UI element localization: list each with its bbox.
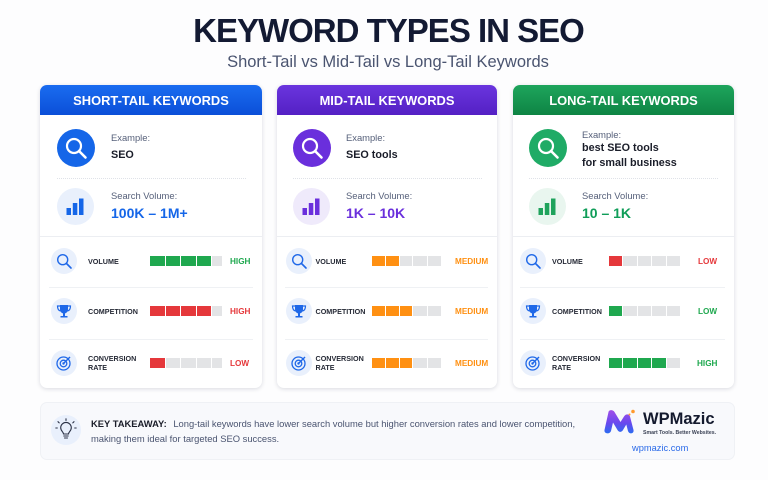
example text: for small business [582, 156, 677, 168]
label: COMPETITION [88, 307, 138, 316]
rating bar [609, 256, 680, 266]
icon: volume chart [57, 188, 94, 225]
row: conversion rate [286, 350, 488, 376]
icon: volume chart [529, 188, 566, 225]
rating bar [372, 306, 441, 316]
heading: mid-tail: MID-TAIL KEYWORDS [320, 93, 454, 108]
subtitle: Short-Tail vs Mid-Tail vs Long-Tail Keywords [227, 53, 549, 71]
icon: search [51, 248, 77, 274]
icon: light bulb [51, 415, 81, 445]
label [316, 354, 364, 372]
row: competition [520, 298, 718, 324]
heading: short-tail: SHORT-TAIL KEYWORDS [73, 93, 229, 108]
search volume label: Search Volume: [346, 190, 412, 201]
label [552, 354, 600, 372]
panel: short-tail keywords [40, 85, 262, 388]
takeaway text: making them ideal for targeted SEO success. [91, 432, 279, 444]
search volume label: Search Volume: [582, 190, 648, 201]
label: RATE [316, 363, 335, 372]
example text: best SEO tools [582, 142, 659, 154]
heading: long-tail: LONG-TAIL KEYWORDS [549, 93, 698, 108]
icon: trophy [520, 298, 546, 324]
icon: search badge [293, 129, 331, 167]
row: conversion rate [51, 350, 250, 376]
rating: LOW [698, 257, 717, 266]
icon: search badge [57, 129, 95, 167]
label: CONVERSION [316, 354, 364, 362]
icon: volume chart [293, 188, 330, 225]
label: VOLUME [88, 257, 119, 266]
label: COMPETITION [316, 307, 365, 316]
example label: Example: [582, 128, 621, 140]
panel: key takeaway [40, 402, 735, 460]
rating: LOW [698, 307, 717, 316]
rating: HIGH [697, 359, 717, 368]
search volume label: Search Volume: [111, 190, 177, 201]
icon: search badge [529, 129, 567, 167]
label: VOLUME [316, 257, 346, 266]
rating bar [150, 306, 222, 316]
heading: short-tail [40, 85, 262, 115]
rating: MEDIUM [455, 307, 488, 316]
rating bar [150, 358, 222, 368]
icon: target [51, 350, 77, 376]
logo name: WPMazic [643, 410, 715, 428]
panel: long-tail keywords [513, 85, 734, 388]
panel: mid-tail keywords [277, 85, 497, 388]
label: RATE [552, 363, 571, 372]
heading: long-tail [513, 85, 734, 115]
example text: SEO [111, 148, 134, 160]
takeaway text: KEY TAKEAWAY: Long-tail keywords have lower search volume but higher conversion rates and lower competition, [91, 418, 575, 428]
rating bar [372, 358, 441, 368]
example label: Example: [346, 132, 385, 143]
label: CONVERSION [552, 354, 600, 362]
row: volume [286, 248, 488, 274]
label: COMPETITION [552, 307, 602, 316]
takeaway text [91, 418, 575, 444]
logo url: wpmazic.com [632, 443, 688, 453]
heading: mid-tail [277, 85, 497, 115]
logo mark [604, 409, 637, 435]
icon: target [520, 350, 546, 376]
rating: HIGH [230, 307, 250, 316]
rating bar [609, 306, 680, 316]
search volume value: 100K – 1M+ [111, 205, 188, 221]
example text [582, 142, 677, 168]
search volume value: 10 – 1K [582, 205, 631, 221]
example text: SEO tools [346, 148, 398, 160]
label: RATE [88, 363, 107, 372]
rating bar [150, 256, 222, 266]
search volume value: 1K – 10K [346, 205, 405, 221]
icon: search [520, 248, 546, 274]
rating: MEDIUM [455, 257, 488, 266]
label [88, 354, 136, 372]
rating: MEDIUM [455, 359, 488, 368]
rating: HIGH [230, 257, 250, 266]
label: CONVERSION [88, 354, 136, 362]
icon: search [286, 248, 312, 274]
logo: WPMazic [604, 410, 716, 453]
title: KEYWORD TYPES IN SEO [193, 12, 584, 49]
row: conversion rate [520, 350, 717, 376]
row: competition [51, 298, 250, 324]
rating bar [372, 256, 441, 266]
example label: Example: [111, 132, 150, 143]
row: volume [51, 248, 250, 274]
icon: target [286, 350, 312, 376]
row: volume [520, 248, 718, 274]
logo tagline: Smart Tools. Better Websites. [643, 430, 716, 436]
rating: LOW [230, 359, 249, 368]
icon: trophy [51, 298, 77, 324]
label: VOLUME [552, 257, 583, 266]
icon: trophy [286, 298, 312, 324]
rating bar [609, 358, 680, 368]
row: competition [286, 298, 488, 324]
